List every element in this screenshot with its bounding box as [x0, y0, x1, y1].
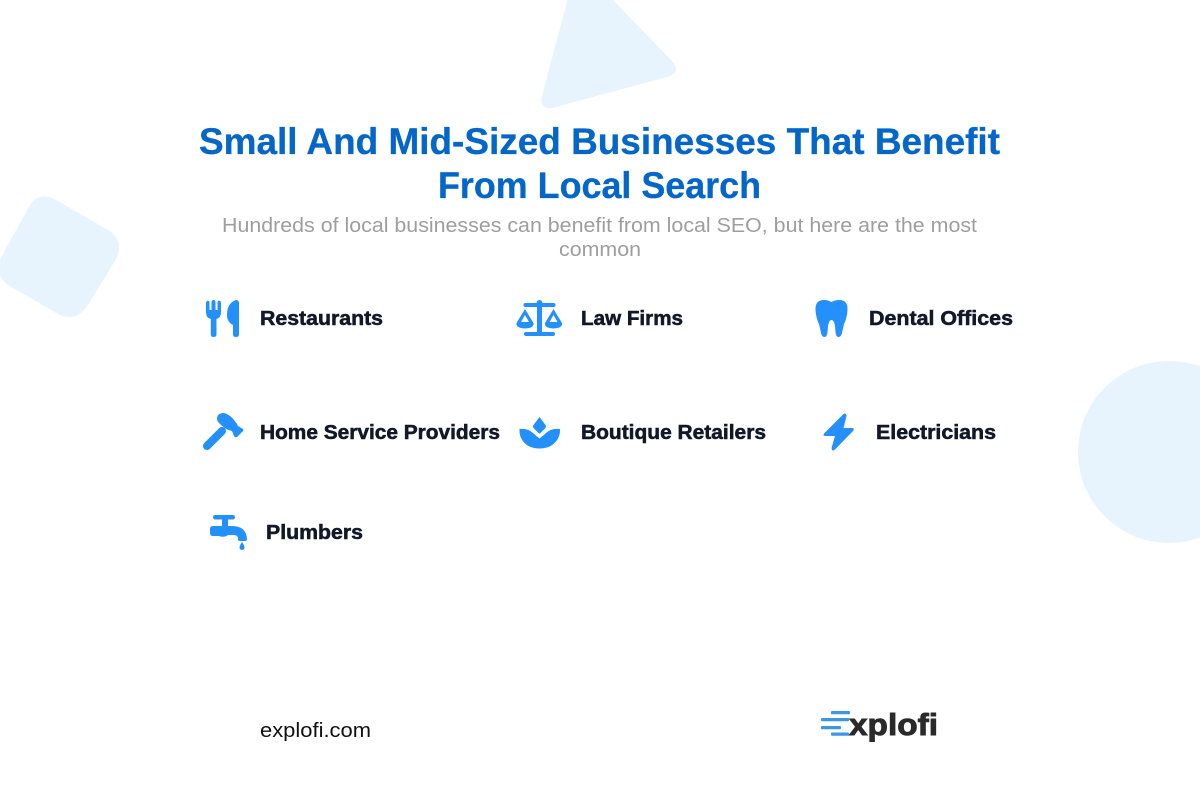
- item: Home Service Providers: [207, 413, 500, 446]
- label: Restaurants: [260, 307, 383, 330]
- item: Restaurants: [206, 300, 383, 337]
- decorative triangle: [542, 0, 676, 108]
- label: Dental Offices: [869, 307, 1013, 330]
- website url: explofi.com: [260, 720, 371, 742]
- logo wordmark: xplofi: [849, 707, 938, 742]
- item: Boutique Retailers: [519, 417, 766, 448]
- subtitle: Hundreds of local businesses can benefit from local SEO, but here are the most: [222, 215, 977, 237]
- label: Boutique Retailers: [581, 421, 766, 444]
- icon: tooth: [815, 300, 848, 337]
- icon: lotus: [519, 417, 560, 448]
- subtitle: [222, 215, 977, 261]
- item: Electricians: [824, 414, 996, 450]
- decorative circle: [1078, 361, 1200, 543]
- item: Law Firms: [516, 300, 683, 336]
- decorative rounded square: [0, 196, 119, 317]
- label: Home Service Providers: [260, 421, 500, 444]
- label: Law Firms: [581, 307, 683, 330]
- icon: fork and knife: [206, 300, 239, 337]
- logo: explofi: [821, 707, 938, 742]
- icon: faucet: [210, 515, 247, 550]
- label: Electricians: [876, 421, 996, 444]
- icon: scales: [516, 300, 562, 336]
- subtitle: common: [559, 239, 641, 261]
- icon: lightning bolt: [824, 414, 854, 450]
- logo lines: [821, 711, 850, 736]
- label: Plumbers: [266, 521, 363, 544]
- item: Plumbers: [210, 515, 363, 550]
- title: Small And Mid-Sized Businesses That Benefit: [199, 121, 1000, 162]
- item: Dental Offices: [815, 300, 1013, 337]
- title: From Local Search: [438, 165, 761, 206]
- title: [199, 121, 1000, 206]
- icon: hammer: [207, 413, 244, 446]
